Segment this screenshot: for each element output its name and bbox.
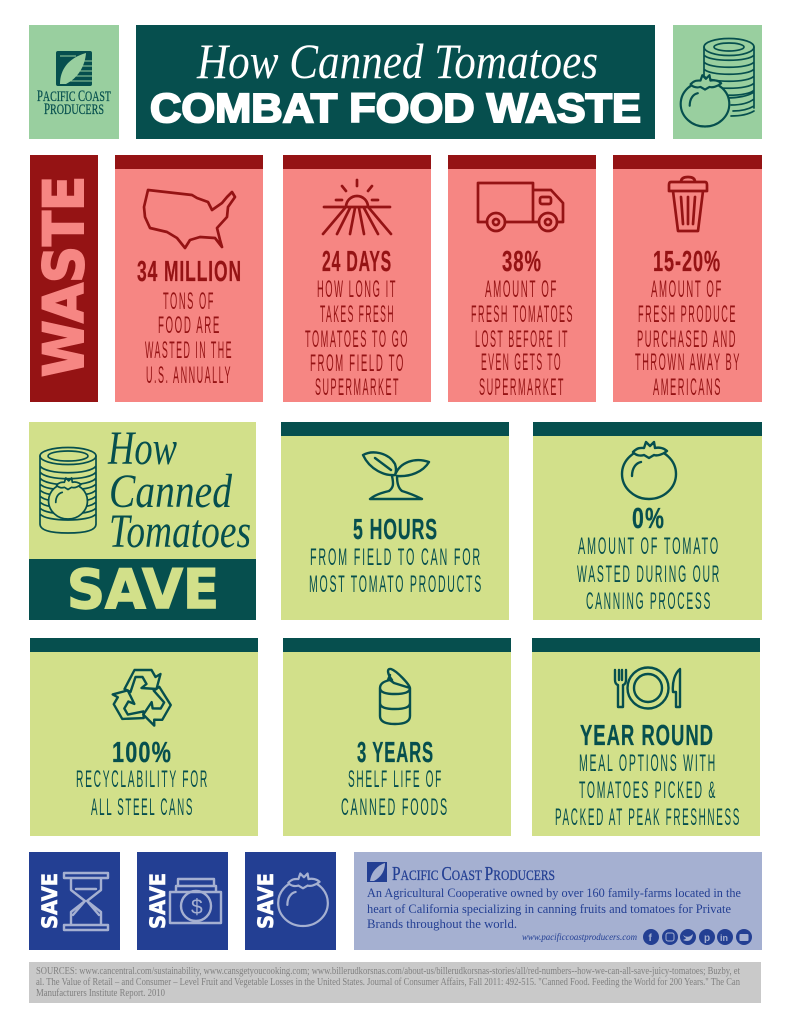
icon: leaf logo mark (56, 51, 92, 86)
website: www.pacificcoastproducers.com (522, 932, 637, 943)
text: TOMATOES TO GO (305, 326, 409, 353)
logo text: PACIFIC COAST (37, 88, 111, 105)
stat text: 38% (502, 246, 542, 278)
logo text (37, 88, 111, 118)
stat text: YEAR ROUND (580, 720, 714, 752)
icon: tomato (622, 442, 676, 499)
sources text (36, 966, 740, 999)
icon: tomato (681, 75, 729, 127)
icon: sprout (363, 452, 429, 499)
icon: stacked cans with tomato (681, 38, 754, 127)
panel: sources (29, 962, 761, 1003)
icon: opened can (380, 669, 410, 724)
icon: tomato can (40, 448, 96, 533)
stat text: 0% (632, 503, 665, 535)
panel: 100 percent: ALL STEEL CANS (91, 794, 194, 821)
stat text (555, 720, 741, 831)
panel: save food (245, 852, 336, 950)
panel: 5 hours (281, 422, 509, 620)
social icons: f (648, 933, 652, 944)
panel: 0 percent (533, 422, 762, 620)
heading: how canned tomatoes (107, 422, 251, 558)
label: save: SAVE (146, 873, 170, 929)
stat text: 15-20% (653, 246, 721, 278)
panel: 34 million (115, 155, 263, 402)
panel: 38 percent: SUPERMARKET (479, 374, 565, 401)
heading: how canned tomatoes: Canned (109, 465, 233, 518)
text: WASTED IN THE (145, 337, 233, 364)
company description: An Agricultural Cooperative owned by over 160 family-farms located in the (367, 885, 741, 900)
icon: truck (478, 183, 563, 231)
panel: year round (532, 638, 760, 836)
panel: 24 days (283, 155, 431, 402)
panel: 3 years: SHELF LIFE OF (348, 766, 443, 793)
heading: how canned tomatoes: How (107, 422, 177, 475)
stat text: 34 MILLION (137, 256, 242, 288)
social icons: in (720, 933, 728, 943)
stat text (341, 737, 449, 821)
title script line: How Canned Tomatoes (196, 33, 598, 89)
panel: 24 days: TAKES FRESH (320, 301, 395, 328)
panel: title (136, 25, 655, 139)
panel: 3 years: CANNED FOODS (341, 794, 449, 821)
panel: cans and tomato icon (673, 25, 762, 139)
panel: 34 million: U.S. ANNUALLY (146, 362, 232, 389)
stat text: 5 HOURS (353, 514, 438, 546)
company description: heart of California specializing in canning fruits and tomatoes for Private (367, 901, 731, 916)
panel: waste label (30, 155, 98, 402)
panel: company info (354, 852, 762, 950)
panel: 5 hours: FROM FIELD TO CAN FOR (310, 544, 482, 571)
icon: tomato (278, 874, 328, 926)
company description (367, 885, 741, 931)
panel: 3 years (283, 638, 511, 836)
stat text: 3 YEARS (357, 737, 434, 769)
icon: trash can (669, 177, 707, 231)
stat text: 100% (112, 737, 172, 769)
stat text (309, 514, 483, 598)
stat text: 24 DAYS (322, 246, 392, 278)
panel: 38 percent: AMOUNT OF (485, 276, 558, 303)
panel: 38 percent (448, 155, 596, 402)
text: FRESH TOMATOES (471, 301, 574, 328)
icon: plate and cutlery (615, 668, 680, 708)
company description: Brands throughout the world. (367, 916, 517, 931)
stat text (577, 503, 721, 615)
stat text: FOOD ARE (158, 312, 221, 339)
panel: 24 days: SUPERMARKET (315, 374, 400, 401)
stat text (76, 737, 209, 821)
heading: how canned tomatoes: Tomatoes (109, 505, 251, 558)
panel: 100 percent (30, 638, 258, 836)
icon: sun over field (323, 180, 391, 234)
heading: save: SAVE (67, 558, 219, 621)
panel: 5 hours: MOST TOMATO PRODUCTS (309, 571, 483, 598)
stat text (471, 246, 574, 401)
social icons (643, 929, 752, 945)
panel: logo (29, 25, 119, 139)
panel: 100 percent: RECYCLABILITY FOR (76, 766, 209, 793)
title bold line: COMBAT FOOD WASTE (150, 85, 641, 131)
stat text (137, 256, 242, 389)
company name: PACIFIC COAST PRODUCERS (392, 863, 555, 885)
icon: banknotes: $ (191, 896, 203, 919)
social icons: p (704, 933, 710, 944)
icon: company logo (367, 862, 387, 882)
icon: hourglass (64, 873, 108, 930)
waste vertical heading: WASTE (32, 176, 96, 377)
panel: how canned tomatoes save (29, 422, 256, 621)
icon: US map (144, 190, 235, 248)
label: save: SAVE (38, 873, 62, 929)
icon: tomato on can (49, 478, 87, 519)
panel: save money (137, 852, 228, 950)
panel: 24 days: FROM FIELD TO (310, 350, 405, 377)
stat text (305, 246, 409, 401)
sources text: Manufacturers Institute Report. 2010 (36, 988, 165, 999)
logo text: PRODUCERS (44, 101, 104, 118)
text: LOST BEFORE IT (475, 326, 569, 353)
stat text: TONS OF (163, 288, 215, 315)
label: save: SAVE (254, 873, 278, 929)
panel: 15-20 percent (613, 155, 762, 402)
panel: 38 percent: EVEN GETS TO (481, 349, 562, 376)
stat text (635, 246, 741, 401)
panel: 24 days: HOW LONG IT (317, 276, 397, 303)
panel: save time (29, 852, 120, 950)
icon: recycle (109, 670, 176, 728)
